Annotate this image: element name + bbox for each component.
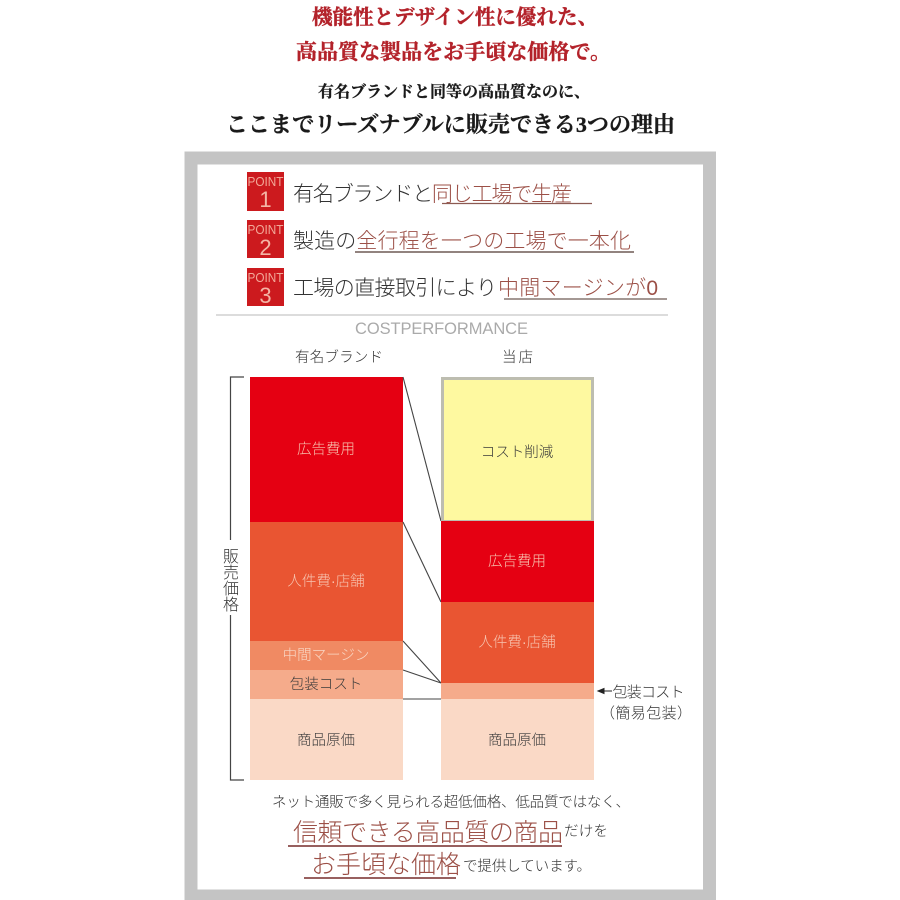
text: closing message: だけを xyxy=(564,823,608,840)
chart: cost comparison xyxy=(223,349,692,780)
segment: advertising xyxy=(441,521,594,602)
icon: point 1 badge: POINT xyxy=(248,175,284,189)
icon: point 3 badge: POINT xyxy=(248,271,284,285)
stacked bar: famous brand xyxy=(250,377,403,780)
icon: point 2 badge xyxy=(247,220,284,260)
icon: point 2 badge: 2 xyxy=(259,235,272,260)
segment: product cost xyxy=(250,699,403,780)
text: point 1: 有名ブランドと同じ工場で生産 xyxy=(293,183,572,206)
segment: labor and store: 人件費·店舗 xyxy=(287,573,365,590)
segment: product cost: 商品原価 xyxy=(488,732,546,749)
bracket: selling price: 格 xyxy=(223,596,239,614)
icon: point 1 badge xyxy=(247,172,284,212)
title: red heading: 機能性とデザイン性に優れた、 xyxy=(312,5,598,29)
subtitle: black heading xyxy=(226,82,675,137)
text: closing message xyxy=(272,794,630,879)
title: red heading xyxy=(296,5,611,64)
point 2 xyxy=(247,220,634,260)
segment: cost reduction xyxy=(442,378,592,522)
segment: advertising: 広告費用 xyxy=(297,441,355,458)
segment: cost reduction: コスト削減 xyxy=(481,444,554,461)
segment: product cost: 商品原価 xyxy=(297,732,355,749)
point 1 xyxy=(247,172,592,212)
title: red heading: 高品質な製品をお手頃な価格で。 xyxy=(296,40,611,64)
subtitle: black heading: ここまでリーズナブルに販売できる3つの理由 xyxy=(226,112,675,137)
segment: advertising xyxy=(250,377,403,522)
bracket: selling price: 販 xyxy=(223,549,239,566)
segment: labor and store xyxy=(441,602,594,683)
icon: point 1 badge: 1 xyxy=(259,187,272,212)
stacked bar: our shop xyxy=(441,378,594,780)
text: point 3: 工場の直接取引により xyxy=(293,277,497,300)
icon: point 3 badge: 3 xyxy=(259,283,272,308)
label: COSTPERFORMANCE: COSTPERFORMANCE xyxy=(355,320,528,338)
segment: labor and store: 人件費·店舗 xyxy=(478,634,556,651)
column header: our shop: 当店 xyxy=(502,349,533,366)
bracket: selling price: 価 xyxy=(223,580,239,598)
text: closing message: で提供しています。 xyxy=(463,858,591,875)
point 3: 中間マージンが0 xyxy=(498,277,658,300)
segment: advertising: 広告費用 xyxy=(488,553,546,570)
bracket: selling price: 売 xyxy=(223,564,239,582)
segment: packaging xyxy=(250,670,403,699)
segment: middle margin xyxy=(250,641,403,670)
text: point 2: 製造の全行程を一つの工場で一本化 xyxy=(293,230,631,253)
segment: packaging: 包装コスト xyxy=(290,676,362,693)
subtitle: black heading: 有名ブランドと同等の高品質なのに、 xyxy=(318,82,590,101)
text: closing message: お手頃な価格 xyxy=(311,851,461,879)
callout: simple packaging: （簡易包装） xyxy=(600,705,692,722)
point 3 xyxy=(247,268,667,308)
connector lines xyxy=(403,377,441,699)
text: closing message: ネット通販で多く見られる超低価格、低品質ではなく、 xyxy=(272,794,630,811)
icon: point 3 badge xyxy=(247,268,284,308)
callout: simple packaging: 包装コスト xyxy=(612,684,684,701)
callout: simple packaging xyxy=(598,684,692,722)
panel: grey frame xyxy=(191,158,710,896)
bracket: selling price xyxy=(223,377,244,780)
column header: famous brand: 有名ブランド xyxy=(295,349,383,366)
icon: point 2 badge: POINT xyxy=(248,223,284,237)
segment: labor and store xyxy=(250,522,403,641)
segment: packaging xyxy=(441,683,594,699)
text: closing message: 信頼できる高品質の商品 xyxy=(293,819,563,847)
segment: product cost xyxy=(441,699,594,780)
segment: middle margin: 中間マージン xyxy=(283,647,369,664)
